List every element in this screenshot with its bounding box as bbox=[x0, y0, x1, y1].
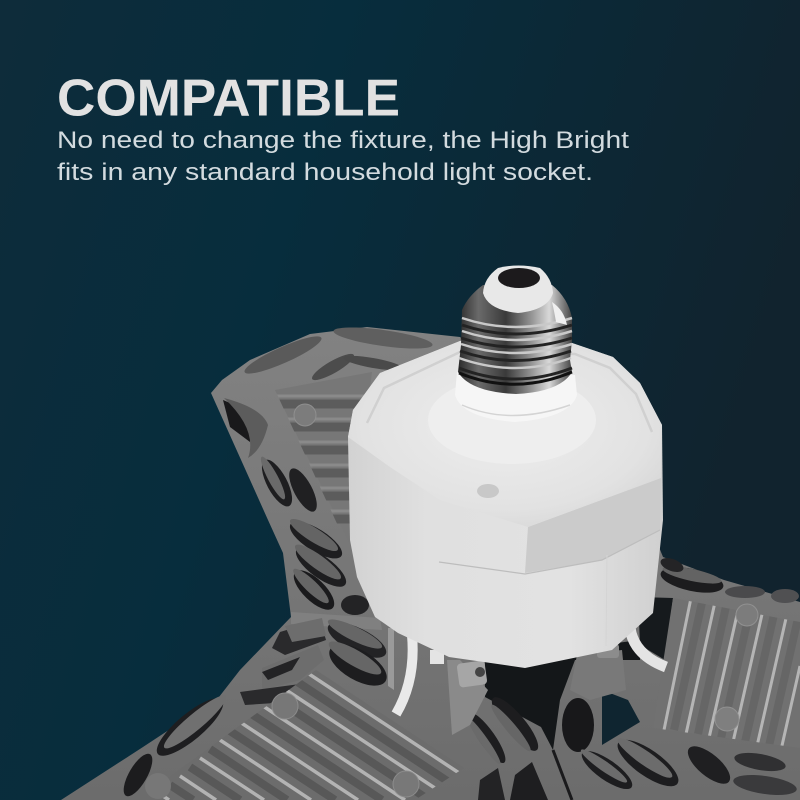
wing outline and lattice base bbox=[61, 327, 800, 800]
title: COMPATIBLE bbox=[57, 70, 400, 128]
dark void beside right panel bbox=[638, 597, 673, 660]
description text bbox=[57, 127, 629, 186]
white insulator tip bbox=[483, 266, 553, 313]
top face bbox=[348, 341, 662, 527]
dark centre gap bbox=[485, 640, 640, 750]
wing separator bbox=[553, 750, 572, 800]
right wing lattice bbox=[562, 555, 799, 798]
facet seam bbox=[439, 530, 660, 574]
right wing ribbed panel bbox=[653, 598, 800, 750]
upper-left wing ribbed panel bbox=[278, 372, 372, 524]
description text: No need to change the fixture, the High Bright bbox=[57, 127, 629, 154]
adapter housing bbox=[348, 341, 663, 668]
metal highlight bbox=[552, 302, 567, 325]
mounting bracket, nuts and wires bbox=[388, 628, 666, 735]
top face rim bbox=[367, 352, 652, 432]
neck bbox=[455, 372, 577, 422]
right shaded facet bbox=[525, 478, 661, 573]
light fixture: three folding LED wings bbox=[61, 323, 800, 800]
contact hole bbox=[498, 268, 540, 288]
thread bands bbox=[459, 318, 572, 384]
lower-left wing lattice bbox=[118, 615, 548, 800]
raised ring bbox=[428, 376, 596, 464]
screw socket bbox=[458, 266, 572, 394]
upper-left wing lattice bbox=[223, 323, 434, 630]
description text: fits in any standard household light socket. bbox=[57, 159, 593, 186]
vent hole bbox=[477, 484, 499, 498]
lower-left wing ribbed panel bbox=[145, 674, 460, 800]
threaded metal shell bbox=[458, 285, 572, 394]
housing body bbox=[348, 341, 663, 668]
